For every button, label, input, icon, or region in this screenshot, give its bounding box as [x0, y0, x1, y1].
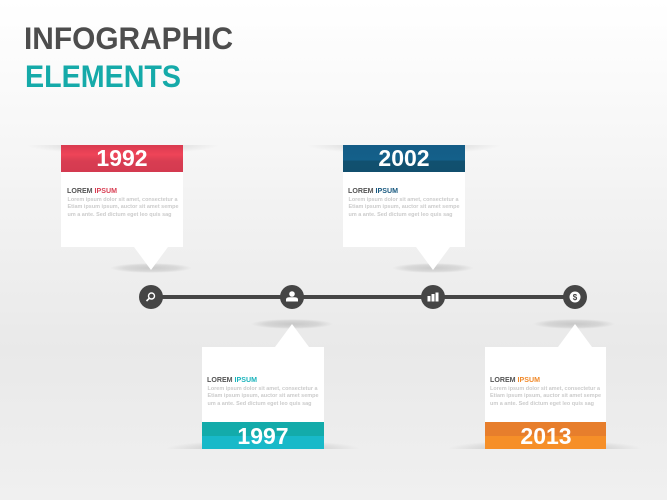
bottom shadow 1997 — [166, 440, 360, 449]
pointer shadow 1997 — [251, 319, 333, 329]
text block 2002: um a ante. Sed dictum eget leo quis sag — [348, 212, 453, 218]
year band 1992 — [61, 145, 183, 172]
year 1992: 1992 — [96, 145, 148, 171]
year band 1997 — [202, 422, 324, 449]
text block 2002 — [348, 188, 460, 218]
title: ELEMENTS — [25, 58, 181, 94]
text block 1992: LOREM IPSUM — [67, 188, 117, 195]
text block 1992: Lorem ipsum dolor sit amet, consectetur a — [68, 197, 178, 203]
icon: dollar coin: $ — [573, 293, 578, 302]
pointer shadow 1992 — [110, 263, 192, 273]
panel: 2002 — [306, 145, 502, 273]
card body 1992 — [61, 172, 183, 270]
top shadow 1992 — [26, 145, 220, 154]
text block 1997: Etiam ipsum ipsum, auctor sit amet sempe — [208, 393, 318, 399]
year 2013: 2013 — [520, 423, 572, 449]
card body 2002 — [343, 172, 465, 270]
text block 1997: Lorem ipsum dolor sit amet, consectetur a — [208, 386, 318, 392]
text block 1992 — [67, 188, 178, 218]
year band 2002 — [343, 145, 465, 172]
pointer shadow 2013 — [533, 319, 615, 329]
panel: 1997 — [166, 319, 360, 449]
text block 2013: LOREM IPSUM — [490, 377, 540, 384]
text block 2013 — [490, 377, 601, 407]
icon: dollar coin — [563, 285, 587, 309]
text block 2002: Etiam ipsum ipsum, auctor sit amet sempe — [348, 204, 460, 210]
pointer shadow 2002 — [392, 263, 474, 273]
text block 2013: Lorem ipsum dolor sit amet, consectetur a — [490, 386, 601, 392]
text block 2013: Etiam ipsum ipsum, auctor sit amet sempe — [490, 393, 601, 399]
icon: person — [280, 285, 304, 309]
year 2002: 2002 — [378, 145, 430, 171]
year band 2013 — [485, 422, 606, 449]
text block 1997 — [207, 377, 318, 407]
text block 1997: um a ante. Sed dictum eget leo quis sag — [208, 401, 312, 407]
panel: 1992 — [26, 145, 220, 273]
text block 1992: Etiam ipsum ipsum, auctor sit amet sempe — [68, 204, 178, 210]
text block 2002: Lorem ipsum dolor sit amet, consectetur a — [348, 197, 459, 203]
card body 2013 — [485, 324, 606, 422]
title: INFOGRAPHIC — [24, 20, 233, 56]
panel: 2013 — [448, 319, 642, 449]
bottom shadow 2013 — [448, 440, 642, 449]
text block 2002: LOREM IPSUM — [348, 188, 398, 195]
card body 1997 — [202, 324, 324, 422]
text block 1992: um a ante. Sed dictum eget leo quis sag — [68, 212, 172, 218]
text block 1997: LOREM IPSUM — [207, 377, 257, 384]
icon: magnifier — [139, 285, 163, 309]
text block 2013: um a ante. Sed dictum eget leo quis sag — [490, 401, 595, 407]
icon: bar chart — [421, 285, 445, 309]
title — [24, 20, 233, 94]
timeline line — [151, 295, 574, 299]
top shadow 2002 — [306, 145, 502, 154]
year 1997: 1997 — [237, 423, 289, 449]
